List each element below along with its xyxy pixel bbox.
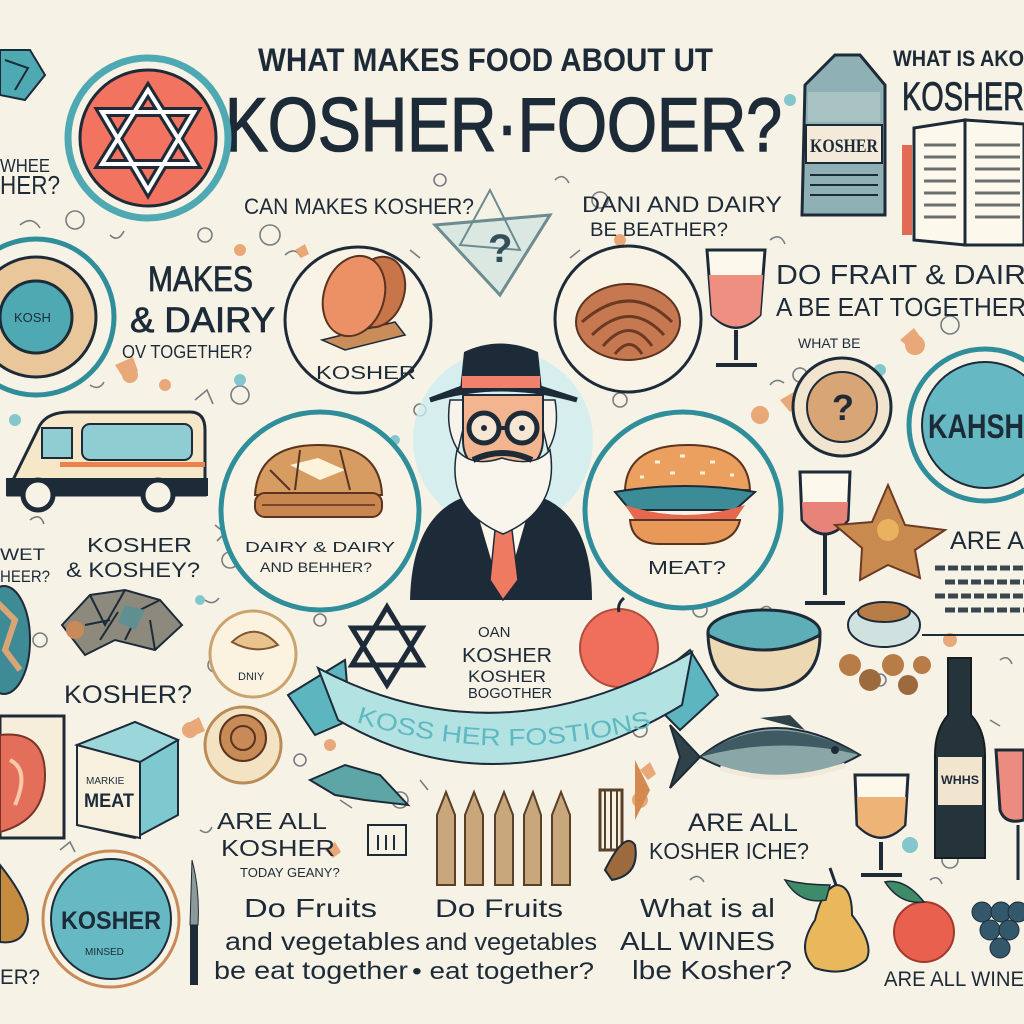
plate icon bbox=[210, 611, 296, 697]
subtitle: can makes kosher: CAN MAKES KOSHER? bbox=[244, 194, 474, 219]
text: do fruits left bbox=[214, 893, 420, 985]
banner: kosher foods ribbon: KOSS HER FOSTIONS bbox=[358, 707, 650, 746]
heading: makes and dairy bbox=[122, 260, 275, 362]
heading: makes and dairy: MAKES bbox=[148, 260, 253, 299]
icon: gold star emblem bbox=[835, 485, 945, 580]
subtitle: dairy question: BE BEATHER? bbox=[590, 220, 728, 241]
badge: left kosher seal bbox=[0, 239, 114, 395]
title: KOSHER·FOOER? bbox=[225, 83, 782, 168]
icon: question coin: WHAT BE bbox=[798, 335, 860, 351]
icon: meat carton: MEAT bbox=[84, 791, 134, 812]
heading: makes and dairy: & DAIRY bbox=[130, 301, 275, 340]
text: what is all wines: What is al bbox=[640, 893, 775, 923]
text block: can kosher together: KOSHER bbox=[468, 667, 546, 686]
icon: star with question mark: ? bbox=[488, 227, 512, 271]
question text: are all panel: ARE A bbox=[950, 527, 1024, 555]
panel: bread dairy circle: DAIRY & DAIRY bbox=[245, 539, 395, 556]
icon: pear left edge bbox=[0, 865, 28, 942]
top-left corner doodle bbox=[0, 50, 45, 100]
badge: kosher bottom left seal: MINSED bbox=[85, 947, 124, 958]
panel: burger meat circle bbox=[585, 412, 781, 608]
icon: apple bbox=[885, 881, 954, 962]
icon: kosher bottle label: KOSHER bbox=[810, 136, 878, 157]
icon: red apple bbox=[580, 598, 658, 687]
panel: bread dairy circle bbox=[221, 412, 419, 610]
text block: can kosher together: KOSHER bbox=[462, 645, 552, 667]
icon: rocks pile bbox=[62, 590, 182, 655]
text block: can kosher together: BOGOTHER bbox=[468, 685, 552, 702]
question text: fruit and dairy bbox=[776, 259, 1024, 322]
question text: kosher left: WET bbox=[0, 545, 45, 564]
icon: white wine glass bbox=[855, 775, 908, 875]
icon: small jar bbox=[368, 825, 406, 855]
text: what is all wines bbox=[620, 893, 792, 985]
panel: kosher bread circle bbox=[285, 247, 431, 393]
text: are all kosher right bbox=[649, 809, 809, 864]
icon: meat carton: MARKIE bbox=[86, 776, 125, 787]
icon: bowl bbox=[708, 610, 820, 690]
question text: are all panel bbox=[922, 527, 1024, 635]
icon: star of david badge bbox=[68, 58, 228, 218]
panel: burger meat circle: MEAT? bbox=[648, 558, 726, 578]
icon: pastry plate bbox=[205, 707, 281, 783]
icon: globe left edge bbox=[0, 586, 30, 694]
heading: makes and dairy: OV TOGETHER? bbox=[122, 342, 252, 362]
left question text: WHEE bbox=[0, 156, 50, 176]
icon: tools and shofar bbox=[600, 760, 650, 880]
text: do fruits left: Do Fruits bbox=[244, 893, 377, 923]
question text: kosher left: & KOSHEY? bbox=[66, 559, 200, 582]
decorative scattered doodles bbox=[9, 94, 1012, 884]
text: do fruits right: Do Fruits bbox=[435, 895, 563, 923]
icon: fish bbox=[670, 715, 860, 788]
icon: meat book bbox=[0, 716, 64, 838]
left question text bbox=[0, 156, 60, 200]
text: kosher question: KOSHER? bbox=[64, 681, 192, 709]
title bbox=[225, 42, 782, 168]
question text: fruit and dairy: DO FRAIT & DAIR bbox=[776, 259, 1024, 290]
text: left bottom question: ER? bbox=[0, 966, 40, 989]
icon: rose wine glass edge bbox=[996, 750, 1024, 880]
icon: star with question mark bbox=[435, 190, 550, 295]
icon: meat carton bbox=[77, 722, 178, 838]
text: do fruits right: and vegetables bbox=[425, 929, 597, 956]
text: what is all wines: ALL WINES bbox=[620, 926, 775, 956]
text: do fruits right: • eat together? bbox=[412, 958, 594, 985]
illustration: rabbi character bbox=[410, 344, 593, 600]
top right heading bbox=[893, 46, 1024, 119]
icon: teal scattered leaves bbox=[310, 765, 408, 805]
icon: wine bottle bbox=[935, 658, 985, 858]
icon: row of candles bbox=[437, 792, 570, 885]
panel: bread dairy circle: AND BEHHER? bbox=[260, 559, 372, 575]
text: what is all wines: lbe Kosher? bbox=[632, 955, 792, 985]
badge: kosher bottom left seal: KOSHER bbox=[61, 907, 161, 935]
text: do fruits right bbox=[412, 895, 597, 985]
badge: kosher teal seal bbox=[909, 349, 1024, 501]
icon: knife bbox=[190, 860, 198, 985]
icon: wine bottle: WHHS bbox=[941, 773, 979, 787]
icon: open book bbox=[902, 120, 1024, 245]
icon: grapes bbox=[972, 902, 1024, 958]
text: are all kosher left: TODAY GEANY? bbox=[240, 865, 340, 880]
badge: kosher bottom left seal bbox=[43, 851, 179, 987]
question text: kosher left: HEER? bbox=[0, 567, 50, 586]
panel: pastry circle bbox=[555, 246, 701, 392]
text: are all kosher right: ARE ALL bbox=[688, 809, 798, 837]
icon: kosher bottle label bbox=[802, 55, 885, 215]
question text: kosher left bbox=[0, 535, 200, 586]
icon: rose wine glass bbox=[707, 250, 765, 365]
icon: pear bbox=[785, 868, 869, 972]
text block: can kosher together: OAN bbox=[478, 624, 511, 641]
text block: can kosher together bbox=[462, 624, 552, 702]
text: are all kosher left bbox=[217, 808, 340, 880]
question text: kosher left: KOSHER bbox=[87, 535, 192, 557]
panel: kosher bread circle: KOSHER bbox=[316, 363, 416, 383]
icon: star of david bbox=[352, 607, 422, 685]
text: are all kosher left: KOSHER bbox=[221, 835, 335, 861]
text: are all kosher left: ARE ALL bbox=[217, 808, 327, 834]
subtitle: dairy question: DANI AND DAIRY bbox=[582, 192, 782, 217]
text: are all kosher right: KOSHER ICHE? bbox=[649, 838, 809, 864]
title: WHAT MAKES FOOD ABOUT UT bbox=[258, 42, 713, 78]
icon: wine glass right bbox=[800, 472, 850, 603]
banner: kosher foods ribbon bbox=[286, 648, 720, 765]
icon: question coin: ? bbox=[832, 387, 854, 428]
left question text: HER? bbox=[0, 170, 60, 200]
icon: question coin bbox=[793, 335, 891, 456]
text: do fruits left: be eat together bbox=[214, 957, 408, 985]
subtitle: dairy question bbox=[582, 192, 782, 241]
icon: kosher van bbox=[6, 412, 208, 510]
text: do fruits left: and vegetables bbox=[225, 928, 420, 956]
badge: left kosher seal: KOSH bbox=[14, 310, 51, 325]
plate icon: DNIY bbox=[238, 671, 265, 683]
icon: pot on nuts bbox=[839, 602, 931, 695]
